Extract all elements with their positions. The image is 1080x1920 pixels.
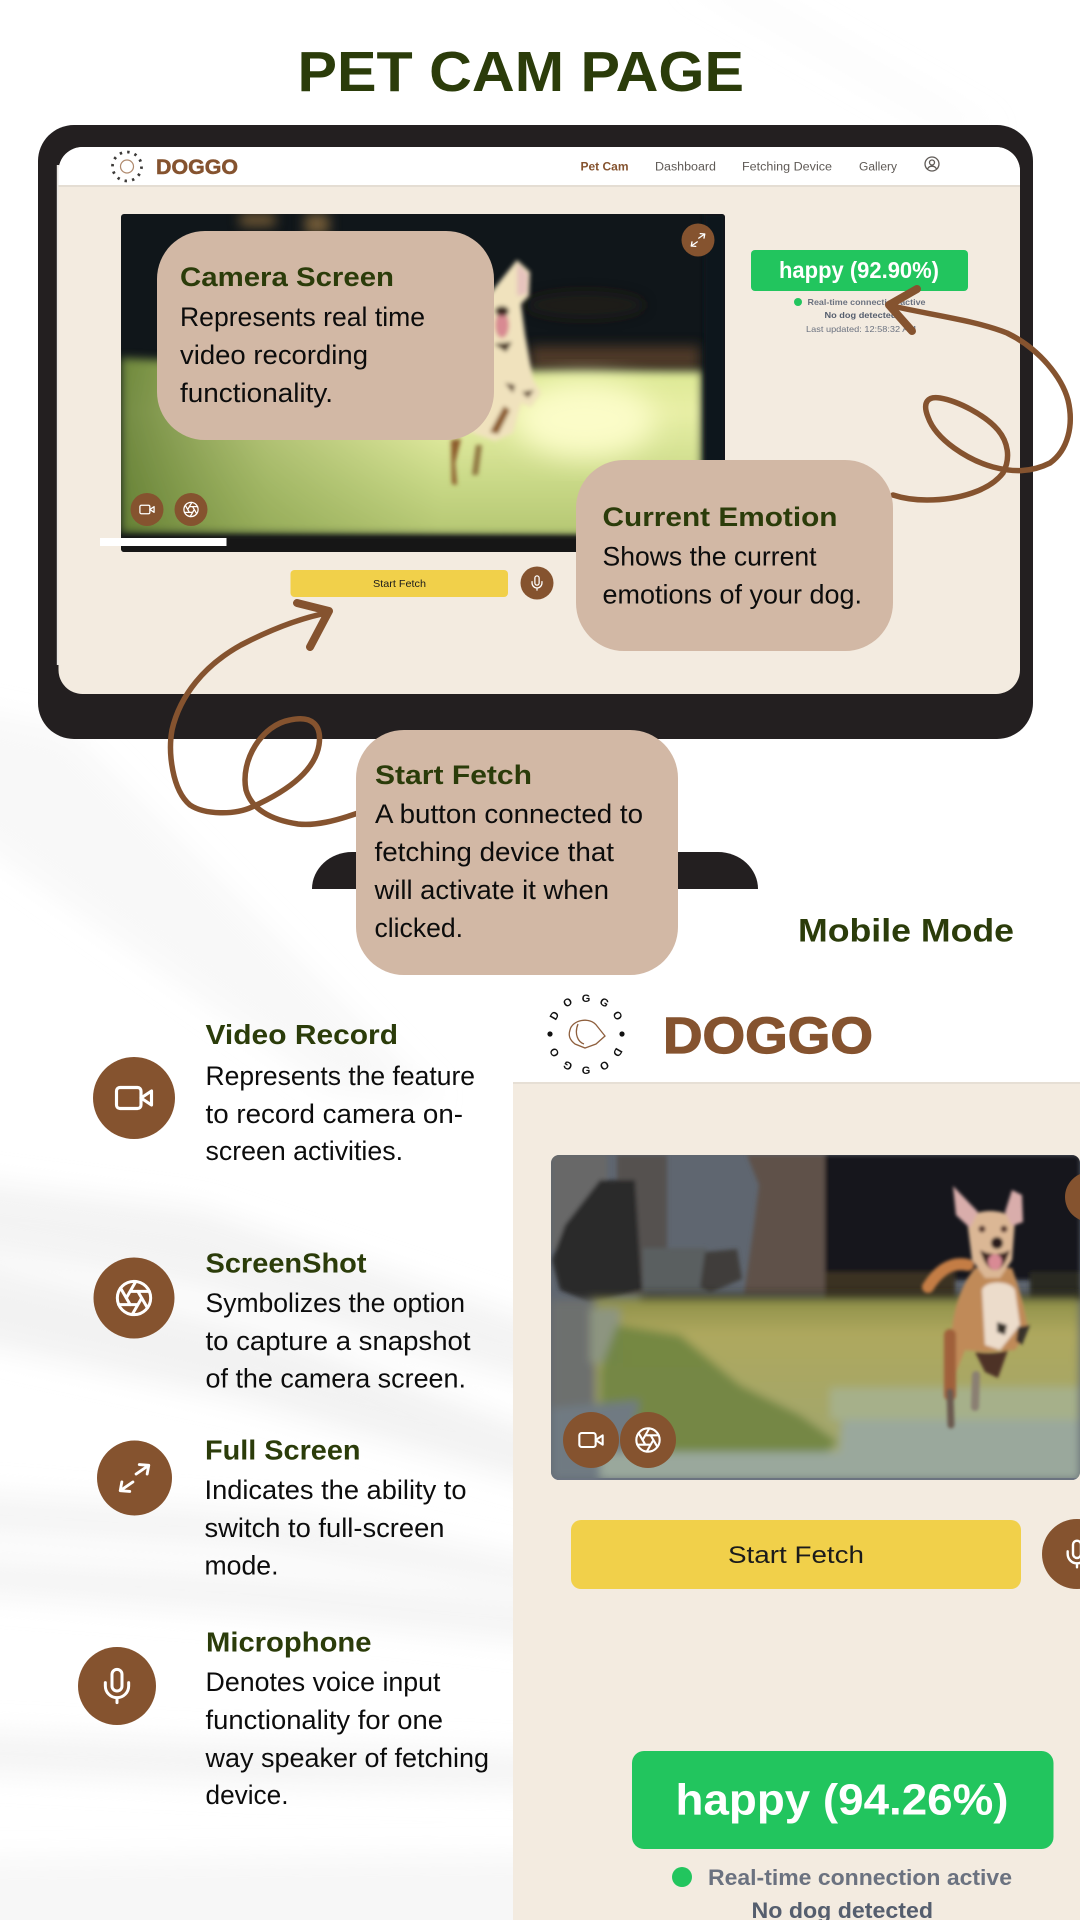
feature text: screen activities. [206, 1136, 403, 1166]
mobile mic button [1042, 1519, 1080, 1589]
emotion badge: happy (92.90%) [779, 257, 939, 283]
mobile start fetch button [571, 1520, 1021, 1589]
feature: screenshot [94, 1248, 471, 1394]
feature text: Symbolizes the option [206, 1288, 465, 1318]
callout text [180, 302, 425, 408]
monitor stand [312, 852, 758, 889]
icon: microphone [78, 1647, 156, 1725]
heading: mobile mode: Mobile Mode [798, 912, 1014, 948]
feature text: mode. [204, 1550, 278, 1580]
callout text: video recording [180, 340, 368, 370]
feature text: Represents the feature [206, 1061, 475, 1091]
feature heading: Microphone [206, 1626, 372, 1658]
icon: mobile logo: O [597, 1058, 611, 1073]
feature text: to capture a snapshot [206, 1326, 471, 1356]
mobile camera video feed [551, 1155, 1080, 1480]
feature text: to record camera on- [206, 1099, 463, 1129]
feature text: Indicates the ability to [204, 1475, 466, 1505]
start fetch button: Start Fetch [373, 578, 426, 590]
screen edge [57, 165, 59, 665]
white bar [100, 538, 226, 546]
callout: current emotion [576, 460, 893, 651]
arrow: current emotion spiral [888, 289, 1070, 500]
icon: mobile logo [547, 993, 625, 1077]
feature text [206, 1061, 475, 1166]
connection status: Real-time connection active [808, 297, 926, 307]
mobile screenshot button [620, 1412, 676, 1468]
mobile connection status: Real-time connection active [708, 1865, 1012, 1890]
feature text [206, 1288, 471, 1394]
icon: desktop logo ring [112, 152, 142, 181]
connection status [794, 297, 926, 334]
start fetch button [290, 570, 508, 597]
icon: mobile logo: D [548, 1010, 562, 1022]
screenshot button [174, 493, 208, 526]
nav link: Pet Cam [580, 162, 628, 174]
callout text: Shows the current [602, 542, 817, 572]
title: PET CAM PAGE [298, 40, 744, 104]
panel: mobile mode screen [513, 993, 1080, 1920]
feature: full screen [97, 1434, 466, 1580]
mobile start fetch button: Start Fetch [728, 1542, 864, 1569]
connection status: Last updated: 12:58:32 AM [806, 324, 916, 334]
dog [928, 1186, 1030, 1425]
icon: mobile logo: D [610, 1046, 624, 1058]
mobile page background [513, 995, 1080, 1920]
callout: start fetch [356, 730, 678, 975]
icon: mobile logo: O [610, 1009, 625, 1023]
connection status: No dog detected [824, 310, 896, 320]
emotion badge [751, 250, 968, 291]
callout text: A button connected to [375, 799, 643, 829]
feature text: way speaker of fetching [205, 1743, 489, 1773]
logo text: DOGGO [156, 156, 238, 179]
callout text: emotions of your dog. [602, 580, 862, 610]
feature heading: Video Record [206, 1019, 398, 1050]
mic button [520, 566, 554, 600]
feature text [205, 1667, 489, 1810]
feature: video record [93, 1019, 475, 1166]
mobile video record button [563, 1412, 619, 1468]
feature: microphone [78, 1626, 489, 1810]
mobile fullscreen button [1065, 1172, 1080, 1222]
mobile connection status [672, 1865, 1012, 1920]
feature heading: ScreenShot [206, 1248, 366, 1278]
feature text [204, 1475, 466, 1580]
dog [451, 260, 541, 485]
camera video feed [121, 214, 725, 558]
mobile navbar [513, 993, 1080, 1084]
callout text: functionality. [180, 378, 333, 408]
feature heading: Full Screen [205, 1434, 360, 1466]
feature text: device. [206, 1780, 288, 1810]
icon: mobile logo: O [561, 995, 575, 1010]
callout: camera screen [157, 231, 494, 440]
feature text: of the camera screen. [206, 1364, 466, 1394]
fullscreen button [682, 224, 714, 256]
icon: mobile logo: O [547, 1045, 562, 1059]
navbar [58, 147, 1020, 187]
callout text: will activate it when [373, 875, 609, 905]
callout text: fetching device that [374, 837, 615, 867]
callout heading: Start Fetch [375, 760, 532, 790]
monitor frame [38, 125, 1033, 739]
nav link: Dashboard [655, 162, 716, 174]
callout text: clicked. [374, 913, 463, 943]
callout heading: Current Emotion [602, 502, 838, 532]
feature text: Denotes voice input [206, 1667, 441, 1697]
callout text: Represents real time [180, 302, 425, 332]
feature text: functionality for one [206, 1705, 443, 1735]
arrow: start fetch spiral [171, 603, 358, 824]
mobile logo text: DOGGO [663, 1007, 873, 1064]
mobile emotion badge: happy (94.26%) [676, 1776, 1008, 1824]
icon: user [925, 157, 939, 171]
nav link: Fetching Device [742, 162, 832, 174]
feature text: switch to full-screen [204, 1513, 444, 1543]
icon: screenshot [94, 1258, 174, 1338]
icon: mobile logo: G [582, 993, 590, 1005]
icon: full screen [97, 1440, 172, 1516]
icon: mobile logo: G [582, 1065, 590, 1077]
icon: video record [93, 1057, 175, 1139]
screen background [58, 147, 1020, 694]
callout heading: Camera Screen [180, 262, 394, 292]
monitor: desktop pet cam page [38, 125, 1033, 739]
nav link: Gallery [859, 162, 897, 174]
video record button [130, 493, 164, 526]
icon: mobile logo: G [561, 1058, 575, 1072]
callout text [602, 542, 862, 610]
mobile emotion badge [632, 1751, 1054, 1849]
callout text [373, 799, 643, 943]
icon: mobile logo: G [597, 996, 611, 1010]
